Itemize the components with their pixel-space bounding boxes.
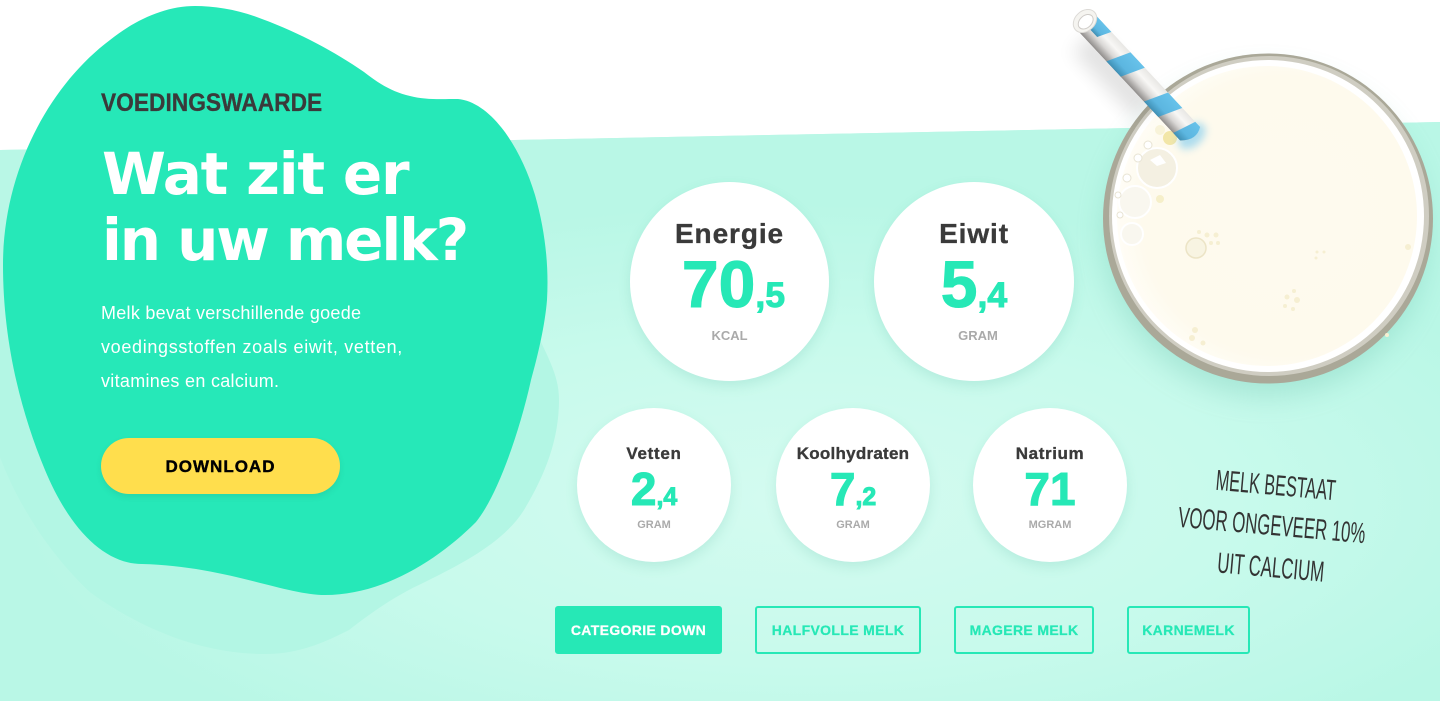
stat: Eiwit: GRAM — [958, 328, 998, 343]
category button: magere — [954, 606, 1094, 654]
glass shadow — [1104, 72, 1428, 396]
title: in uw melk? — [102, 206, 467, 274]
handwritten note: UIT CALCIUM — [1216, 548, 1325, 589]
stat: Natrium — [973, 408, 1127, 562]
description: voedingsstoffen zoals eiwit, vetten, — [101, 337, 403, 357]
stat: Koolhydraten: Koolhydraten — [797, 444, 909, 463]
stat: Energie: 70,5 — [682, 247, 785, 321]
stat: Eiwit: 5,4 — [941, 247, 1007, 321]
milk glass with straw — [1072, 9, 1434, 404]
stat: Vetten: GRAM — [637, 519, 671, 531]
category button: halfvolle — [755, 606, 921, 654]
category button: magere: MAGERE MELK — [970, 622, 1078, 638]
category button: karnemelk: KARNEMELK — [1142, 622, 1235, 638]
stat: Natrium: Natrium — [1016, 444, 1084, 463]
download button: DOWNLOAD — [166, 457, 275, 476]
stat: Vetten: Vetten — [626, 444, 682, 463]
description — [101, 303, 403, 391]
straw — [1072, 9, 1210, 154]
title: Wat zit er — [102, 140, 408, 208]
bubbles — [1115, 125, 1411, 346]
stat: Energie: Energie — [675, 218, 784, 249]
handwritten note: MELK BESTAAT — [1215, 464, 1337, 506]
stat: Vetten — [577, 408, 731, 562]
stat: Eiwit — [874, 182, 1074, 381]
stat: Energie — [630, 182, 829, 381]
main green blob — [3, 6, 548, 595]
category button: karnemelk — [1127, 606, 1250, 654]
stat: Energie: KCAL — [711, 328, 748, 343]
stat: Natrium: 71 — [1024, 463, 1076, 515]
stat: Koolhydraten — [776, 408, 930, 562]
stat: Eiwit: Eiwit — [939, 218, 1009, 249]
glass rim — [1103, 54, 1433, 384]
category button: active — [555, 606, 722, 654]
stat: Koolhydraten: 7,2 — [830, 463, 876, 515]
eyebrow heading: VOEDINGSWAARDE — [101, 89, 322, 117]
title — [102, 140, 467, 274]
description: vitamines en calcium. — [101, 371, 279, 391]
handwritten note: VOOR ONGEVEER 10% — [1177, 502, 1367, 550]
description: Melk bevat verschillende goede — [101, 303, 361, 323]
stat: Natrium: MGRAM — [1029, 519, 1071, 531]
download button — [101, 438, 340, 494]
handwritten note — [1177, 464, 1367, 589]
stat: Koolhydraten: GRAM — [836, 519, 870, 531]
category button: active: CATEGORIE DOWN — [571, 622, 706, 638]
category button: halfvolle: HALFVOLLE MELK — [772, 622, 904, 638]
stat: Vetten: 2,4 — [631, 463, 677, 515]
light blob — [0, 340, 559, 654]
milk surface — [1117, 66, 1417, 366]
